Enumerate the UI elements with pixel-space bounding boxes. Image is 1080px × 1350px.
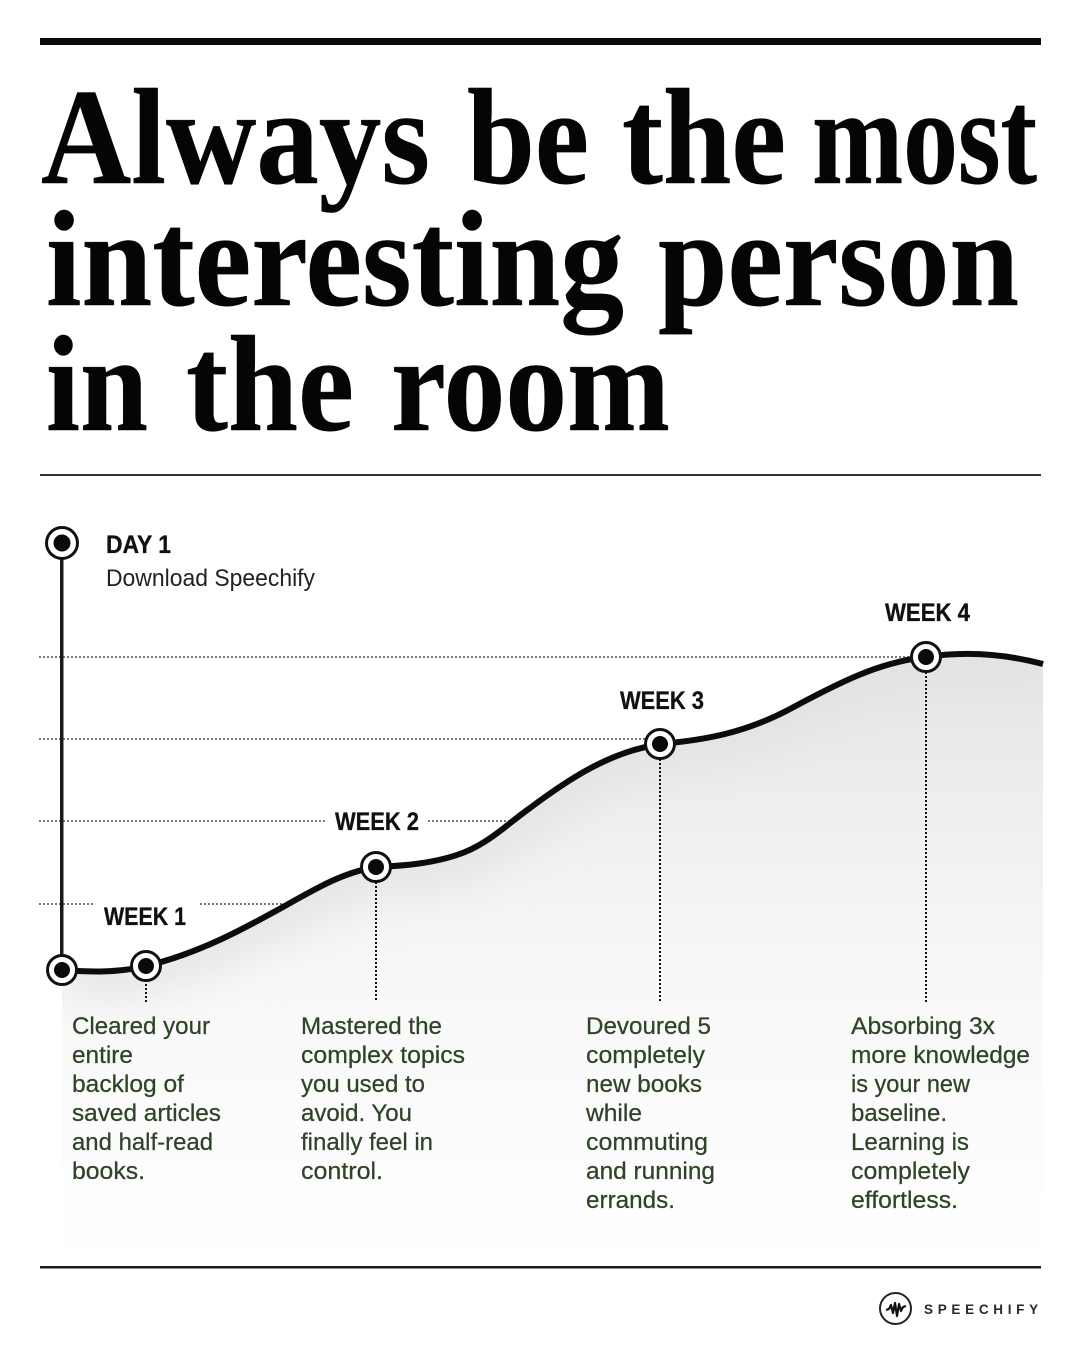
text: week 3 outcome: while <box>585 1100 642 1127</box>
marker: day 1 start <box>46 528 78 558</box>
marker: week 3 <box>646 730 674 758</box>
text: week 1 outcome: backlog of <box>72 1071 184 1098</box>
title: person <box>658 183 1019 335</box>
week 2 label: WEEK 2 <box>335 808 419 836</box>
growth curve <box>62 654 1043 971</box>
week 3 label: WEEK 3 <box>620 687 704 715</box>
text: week 2 outcome: finally feel in <box>301 1129 433 1156</box>
icon: speechify logo <box>880 1293 911 1324</box>
text: week 3 outcome <box>585 1013 715 1214</box>
marker: week 1 <box>132 952 160 980</box>
top rule <box>40 38 1041 45</box>
text: week 4 outcome: baseline. <box>851 1100 947 1127</box>
title divider <box>40 474 1041 476</box>
text: week 2 outcome: control. <box>301 1158 383 1185</box>
text: week 1 outcome: Cleared your <box>72 1013 210 1040</box>
day 1 label: DAY 1 <box>106 531 171 559</box>
bottom rule <box>40 1266 1041 1268</box>
text: week 3 outcome: commuting <box>586 1129 708 1156</box>
title: the <box>622 61 786 213</box>
vertical timeline axis <box>60 556 64 956</box>
text: week 1 outcome: and half-read <box>72 1129 213 1156</box>
text: week 1 outcome: entire <box>72 1042 133 1069</box>
text: week 2 outcome: avoid. You <box>301 1100 412 1127</box>
text: week 4 outcome: Absorbing 3x <box>851 1013 995 1040</box>
horizontal dotted guides <box>39 657 925 904</box>
text: week 2 outcome <box>301 1013 465 1185</box>
text: week 4 outcome: effortless. <box>851 1187 958 1214</box>
day 1 description: Download Speechify <box>106 565 315 592</box>
week 4 label: WEEK 4 <box>885 599 970 627</box>
text: week 3 outcome: errands. <box>586 1187 675 1214</box>
text: week 4 outcome: more knowledge <box>851 1042 1030 1069</box>
text: week 3 outcome: and running <box>586 1158 715 1185</box>
title: in <box>46 308 148 460</box>
text: week 3 outcome: new books <box>586 1071 702 1098</box>
text: week 2 outcome: you used to <box>301 1071 425 1098</box>
title: interesting <box>46 183 624 335</box>
marker: week 2 <box>362 852 390 882</box>
week 1 label: WEEK 1 <box>104 903 186 931</box>
marker: curve origin <box>48 956 76 984</box>
text: week 4 outcome: is your new <box>851 1071 971 1098</box>
brand name: SPEECHIFY <box>924 1302 1043 1317</box>
marker: week 4 <box>912 642 940 672</box>
vertical dotted connectors <box>146 672 926 1002</box>
text: week 3 outcome: Devoured 5 <box>586 1013 711 1040</box>
text: week 4 outcome: completely <box>851 1158 970 1185</box>
text: week 2 outcome: complex topics <box>301 1042 465 1069</box>
text: week 1 outcome: books. <box>72 1158 145 1185</box>
text: week 3 outcome: completely <box>586 1042 705 1069</box>
text: week 1 outcome <box>72 1013 221 1185</box>
text: week 2 outcome: Mastered the <box>301 1013 442 1040</box>
text: week 4 outcome <box>851 1013 1030 1214</box>
title: room <box>391 308 670 460</box>
text: week 1 outcome: saved articles <box>72 1100 221 1127</box>
area under growth curve <box>62 657 1043 1024</box>
title: the <box>186 308 354 460</box>
title: Always <box>41 61 430 213</box>
text: week 4 outcome: Learning is <box>851 1129 969 1156</box>
title: be <box>467 61 589 213</box>
title <box>41 61 1037 460</box>
